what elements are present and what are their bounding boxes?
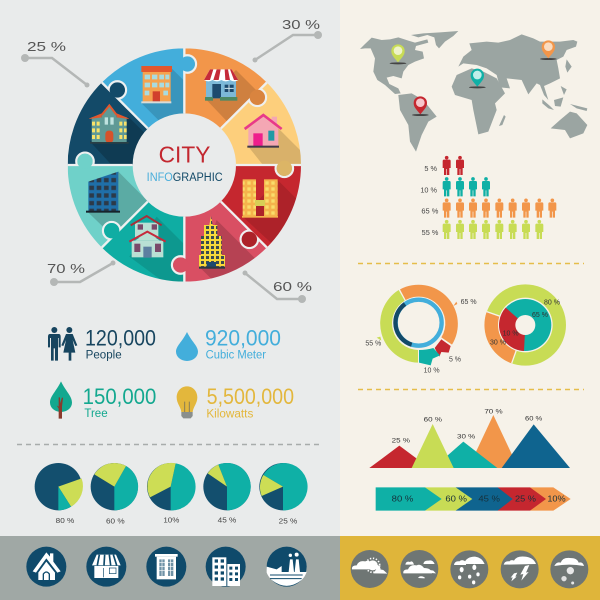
icon: sun and cloud: [351, 550, 389, 588]
peak labels: 70 %: [484, 408, 503, 415]
arrow labels: 10%: [547, 493, 566, 503]
arrow labels: 45 %: [478, 493, 501, 503]
arrow labels: 25 %: [515, 493, 537, 503]
donut chart: right: 30 %: [490, 339, 506, 346]
donut chart: left: 65 %: [461, 299, 477, 306]
people pictogram chart: [420, 156, 556, 239]
segment: light teal: [68, 165, 148, 248]
arrow bar chart: [376, 487, 571, 511]
peak labels: 30 %: [457, 433, 476, 440]
peak labels: 60 %: [525, 415, 543, 422]
icon: factory: [267, 547, 307, 587]
stats block: [48, 325, 294, 420]
background: left panel: [0, 0, 340, 536]
callout: 25 %: [21, 39, 90, 88]
peak labels: 25 %: [392, 437, 410, 444]
dividers: right: [358, 264, 584, 390]
donut chart: left: 10 %: [424, 368, 440, 375]
arrow labels: 60 %: [445, 493, 468, 503]
center title: CITY: CITY: [159, 142, 211, 168]
weather icons row: [351, 550, 588, 588]
segment: pink: [184, 202, 267, 282]
pie: 45 %: 45 %: [218, 516, 237, 525]
building: pink house: [245, 115, 282, 148]
peak labels: [392, 408, 543, 444]
row: 5 %: 5 %: [424, 164, 437, 173]
callout: 30 %: [252, 17, 322, 62]
arrow: 25 %: [498, 487, 546, 511]
puzzle knobs: [76, 55, 293, 274]
pie: 25 %: [259, 463, 308, 526]
building icons row: [26, 547, 307, 587]
row: 55 %: 55 %: [422, 228, 439, 237]
stat: water: Cubic Meter: [206, 347, 266, 361]
donut chart: left: 5 %: [449, 356, 461, 363]
pie: 80 %: 80 %: [56, 516, 75, 525]
map pin: green: [390, 44, 406, 64]
icon: clouds: [400, 550, 438, 588]
stat: tree: Tree: [84, 406, 108, 420]
building: teal house: [129, 216, 166, 258]
world map: [360, 31, 587, 152]
icon: shop: [86, 547, 126, 587]
stat: tree: [83, 384, 156, 420]
callout: 70 %: 70 %: [47, 261, 86, 276]
arrow: 45 %: [456, 487, 513, 511]
pie: 80 %: [35, 463, 83, 525]
pie charts row: [35, 463, 308, 526]
icon: light bulb: [177, 386, 197, 418]
icon: snow: [550, 550, 588, 588]
peak labels: 60 %: [424, 417, 442, 424]
background: right panel: [340, 0, 600, 536]
pie: 60 %: [91, 463, 138, 526]
center subtitle: INFOGRAPHIC: INFOGRAPHIC: [147, 170, 223, 184]
segment: navy: [68, 82, 148, 165]
pie: 25 %: 25 %: [279, 517, 298, 526]
building: shop: [204, 69, 238, 101]
map pin: orange: [540, 40, 557, 60]
donut charts: [365, 284, 566, 375]
callout: 60 %: 60 %: [273, 279, 313, 294]
building: mansion: [89, 105, 129, 144]
peak: 25 %: [369, 446, 429, 468]
stat: people: [85, 325, 156, 361]
stat: people: 120,000: [85, 325, 156, 350]
stat: people: People: [86, 347, 122, 361]
segment: red: [221, 166, 301, 248]
donut chart: right: 65 %: [532, 312, 548, 319]
stat: electricity: 5,500,000: [207, 384, 294, 409]
segment: orange: [184, 48, 267, 128]
pie: 10%: 10%: [163, 516, 180, 525]
icon: apartment block: [146, 547, 186, 587]
pie: 10%: [147, 463, 196, 525]
icon: people: [48, 327, 77, 361]
pie: 60 %: 60 %: [106, 517, 125, 526]
map pin: teal: [469, 69, 486, 88]
donut chart: right: 80 %: [544, 299, 560, 306]
icon: lightning: [501, 550, 539, 588]
peak: 70 %: [468, 415, 518, 468]
puzzle wheel chart: [68, 48, 367, 333]
donut chart: left: 55 %: [365, 340, 381, 347]
arrow: 60 %: [425, 487, 472, 511]
arrow: 80 %: [376, 487, 442, 511]
callout: 30 %: 30 %: [282, 17, 321, 32]
icon: towers: [206, 547, 246, 587]
building: apartment: [141, 66, 172, 103]
mountain chart: [369, 408, 570, 468]
icon: water drop: [176, 332, 198, 361]
arrow labels: [392, 493, 566, 503]
row: 65 %: 65 %: [421, 207, 439, 216]
band: building icons: [0, 536, 340, 600]
icon: rain: [450, 550, 488, 588]
stat: water: 920,000: [205, 325, 281, 350]
building: blue office: [86, 172, 120, 213]
icon: house: [26, 547, 66, 587]
row: 10 %: 10 %: [420, 185, 437, 194]
segment gaps: [68, 48, 301, 282]
segment: blue: [102, 48, 184, 128]
donut chart: right: [484, 284, 566, 366]
map pin: red: [412, 96, 429, 116]
arrow labels: 80 %: [392, 493, 414, 503]
segment: yellow: [221, 82, 301, 164]
icon: tree: [50, 381, 72, 419]
divider: left: [17, 444, 320, 446]
stat: tree: 150,000: [83, 384, 156, 409]
pie: 45 %: [203, 463, 251, 525]
building: yellow tower: [199, 216, 225, 269]
peak: 60 %: [412, 424, 454, 468]
stat: water: [205, 325, 281, 361]
callout: 60 %: [242, 270, 313, 303]
stat: electricity: [206, 384, 294, 420]
map: continents: [360, 31, 587, 152]
building: twin towers: [242, 179, 278, 218]
callout: 70 %: [47, 260, 116, 286]
peak: 60 % blue: [502, 424, 570, 468]
donut chart: right: 10 %: [503, 330, 519, 337]
donut chart: left: [365, 285, 477, 375]
arrow: 10%: [530, 487, 571, 511]
band: weather icons: [340, 536, 600, 600]
segment: teal: [102, 202, 184, 282]
stat: electricity: Kilowatts: [206, 406, 253, 420]
peak: 30 %: [433, 442, 497, 468]
callout: 25 %: 25 %: [27, 39, 67, 54]
